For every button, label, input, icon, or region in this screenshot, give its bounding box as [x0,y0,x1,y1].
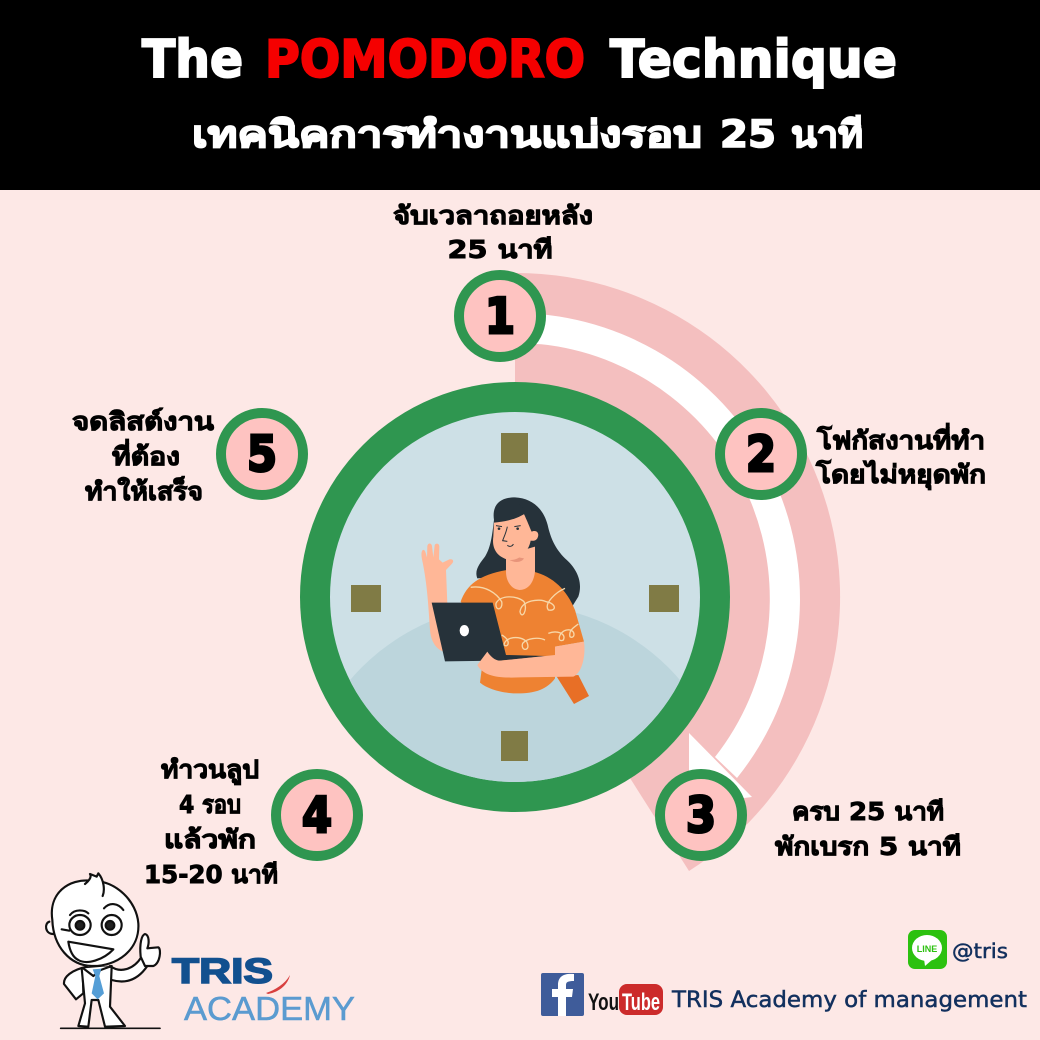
laptop [432,603,547,661]
icon: YouTube: You [588,989,619,1016]
icon: YouTube [588,984,663,1016]
step 5: 5 [247,426,277,483]
label step 4 [144,755,278,889]
step 2 [720,413,802,495]
header band [0,0,1040,190]
label step 1: 25 นาที [448,235,552,264]
clock [300,382,730,812]
shirt [461,570,584,693]
TRIS Academy logo: TRIS [172,952,273,991]
label step 4: ทำวนลูป [161,755,259,786]
title: The [142,30,243,90]
title: Technique [610,30,897,90]
step 4 [276,774,358,856]
mascot [46,873,160,1028]
title: POMODORO [265,30,585,90]
neck [506,547,535,590]
subtitle: เทคนิคการทำงานแบ่งรอบ [192,113,702,156]
subtitle: นาที [791,113,863,156]
label step 3 [775,797,961,861]
TRIS Academy logo: ACADEMY [184,990,355,1027]
step 3 [660,774,742,856]
step 3: 3 [686,787,716,844]
white arrow [535,314,800,805]
label step 4: 4 รอบ [179,790,241,819]
label step 5: ทำให้เสร็จ [85,476,203,506]
title [142,30,897,90]
label step 2: โดยไม่หยุดพัก [815,459,986,491]
hair [476,497,580,607]
step 4: 4 [302,787,332,844]
icon: Facebook [541,973,584,1016]
label step 4: 15-20 นาที [144,860,278,889]
label step 2: โฟกัสงานที่ทำ [816,423,985,455]
forearm [477,642,584,678]
subtitle: 25 [720,113,776,156]
woman with laptop [421,497,589,704]
step 2: 2 [746,426,776,483]
belt strap [557,675,589,704]
LINE handle: @tris [952,939,1008,963]
step 5 [221,413,303,495]
icon: YouTube: Tube [622,989,660,1016]
pink timer sector [515,273,840,871]
channel name: TRIS Academy of management [671,988,1027,1013]
label step 1: จับเวลาถอยหลัง [393,201,593,230]
raised arm [421,543,453,652]
label step 5: จดลิสต์งาน [72,407,214,436]
subtitle [192,113,863,156]
icon: LINE: LINE [917,944,937,954]
label step 5: ที่ต้อง [112,439,180,471]
label step 4: แล้วพัก [164,825,256,854]
label step 1 [393,201,593,264]
step 1: 1 [485,288,515,345]
step 1 [459,275,541,357]
icon: LINE [908,930,947,969]
label step 3: ครบ 25 นาที [792,797,944,826]
label step 2 [815,423,986,491]
label step 5 [72,407,214,506]
face [493,513,538,560]
TRIS Academy logo [172,952,355,1027]
label step 3: พักเบรก 5 นาที [775,832,961,861]
